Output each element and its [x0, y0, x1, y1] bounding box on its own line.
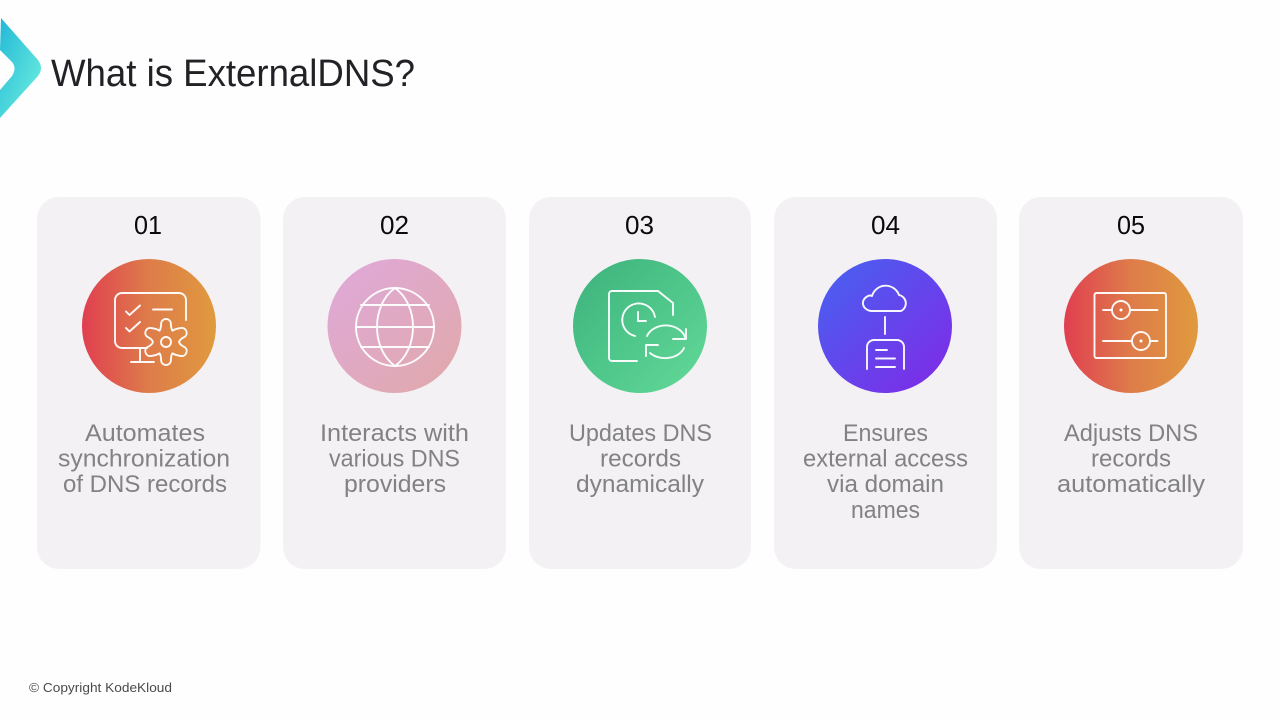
description 02: Interacts with — [320, 420, 469, 447]
description 01 — [58, 420, 230, 498]
description 03: Updates DNS — [569, 420, 712, 447]
description 04 — [803, 420, 968, 524]
number 05: 05 — [1117, 210, 1145, 240]
icon: document with clock and sync arrows — [573, 259, 707, 393]
icon: sliders panel — [1064, 259, 1198, 393]
description 03: records — [600, 446, 681, 472]
description 01: of DNS records — [63, 471, 227, 498]
description 05: Adjusts DNS — [1064, 420, 1198, 447]
number 02: 02 — [380, 210, 409, 240]
description 01: synchronization — [58, 446, 230, 472]
icon: cloud linked to server document — [818, 259, 952, 393]
description 03 — [569, 420, 712, 498]
description 04: external access — [803, 446, 968, 472]
number 03: 03 — [625, 210, 654, 240]
description 04: Ensures — [843, 420, 928, 447]
description 05: records — [1091, 446, 1171, 472]
icon: globe — [328, 259, 462, 393]
panel: 04 external access — [774, 197, 997, 569]
description 04: names — [851, 497, 920, 524]
panel: 05 adjusts automatically — [1019, 197, 1243, 569]
description 03: dynamically — [576, 471, 704, 498]
panel: 02 interacts with providers — [283, 197, 506, 569]
description 01: Automates — [85, 420, 205, 447]
logo chevron — [0, 18, 41, 118]
panel: 01 automates synchronization — [37, 197, 260, 569]
description 05: automatically — [1057, 471, 1205, 498]
description 02 — [320, 420, 469, 498]
description 02: providers — [344, 471, 446, 498]
number 04: 04 — [871, 210, 900, 240]
panel: 03 updates dynamically — [529, 197, 751, 569]
copyright footer: © Copyright KodeKloud — [29, 680, 172, 695]
number 01: 01 — [134, 210, 162, 240]
icon: checklist monitor with gear — [82, 259, 216, 393]
description 02: various DNS — [329, 446, 460, 472]
description 04: via domain — [827, 471, 944, 498]
description 05 — [1057, 420, 1205, 498]
title: What is ExternalDNS? — [51, 53, 415, 95]
